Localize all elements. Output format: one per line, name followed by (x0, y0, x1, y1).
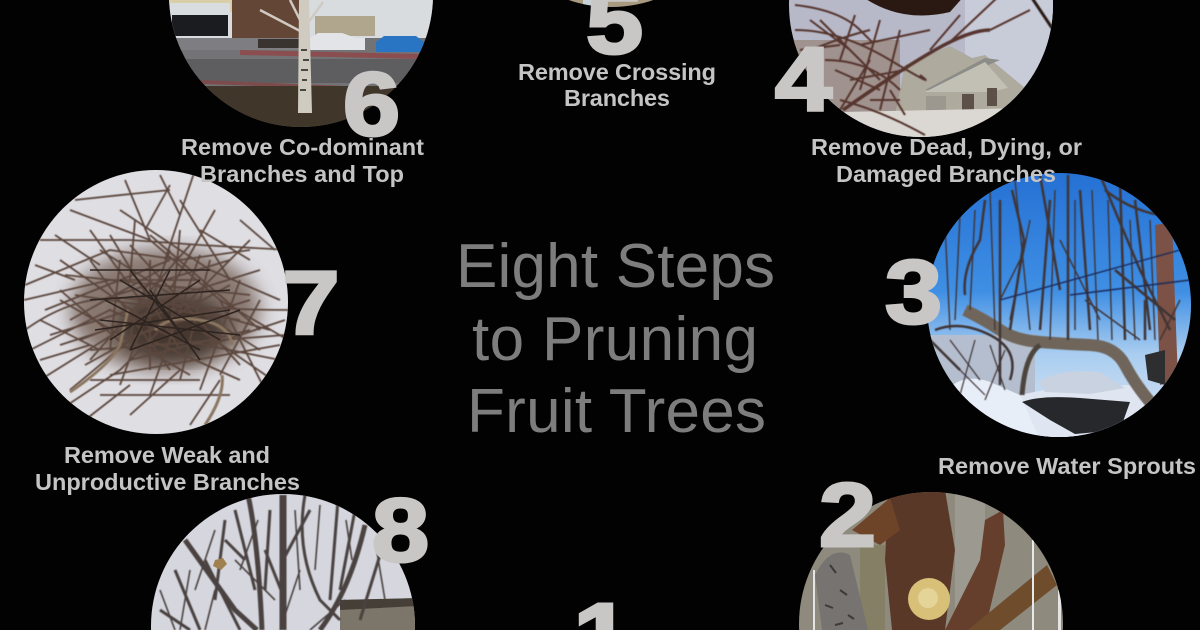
label: step 7: Unproductive Branches (35, 469, 300, 495)
photo circle 6: birch in a parking lot (165, 0, 440, 131)
label: step 4 (811, 134, 1082, 187)
label: step 5 (518, 59, 716, 111)
label: step 3: Remove Water Sprouts (938, 453, 1196, 479)
number 3: 3 (885, 243, 942, 343)
label: step 7: Remove Weak and (64, 442, 270, 468)
photo circle 5: sliver at top edge (568, 0, 654, 7)
number 4: 4 (775, 30, 832, 130)
label: step 6 (181, 134, 424, 187)
title (456, 232, 775, 446)
label: step 4: Damaged Branches (836, 161, 1056, 187)
photo circle 4: dead branches in front of a house (785, 0, 1065, 140)
label: step 4: Remove Dead, Dying, or (811, 134, 1082, 160)
title: Eight Steps (456, 232, 775, 301)
label: step 5: Branches (564, 85, 670, 111)
number 7: 7 (282, 254, 340, 354)
number 6: 6 (343, 55, 400, 155)
label: step 6: Remove Co-dominant (181, 134, 424, 160)
photo circle 8: bare pruned tree against sky (150, 490, 420, 630)
title: to Pruning (472, 305, 758, 374)
number 8: 8 (372, 481, 429, 581)
label: step 5: Remove Crossing (518, 59, 716, 85)
title: Fruit Trees (467, 377, 766, 446)
photo circle 2: pruning cut on trunk (795, 488, 1067, 630)
label: step 6: Branches and Top (200, 161, 404, 187)
number 2: 2 (819, 466, 876, 566)
label: step 7 (35, 442, 300, 495)
photo circle 7: pile of pruned branches on snow (20, 165, 295, 440)
photo circle 3: water sprouts against blue sky (925, 170, 1193, 440)
